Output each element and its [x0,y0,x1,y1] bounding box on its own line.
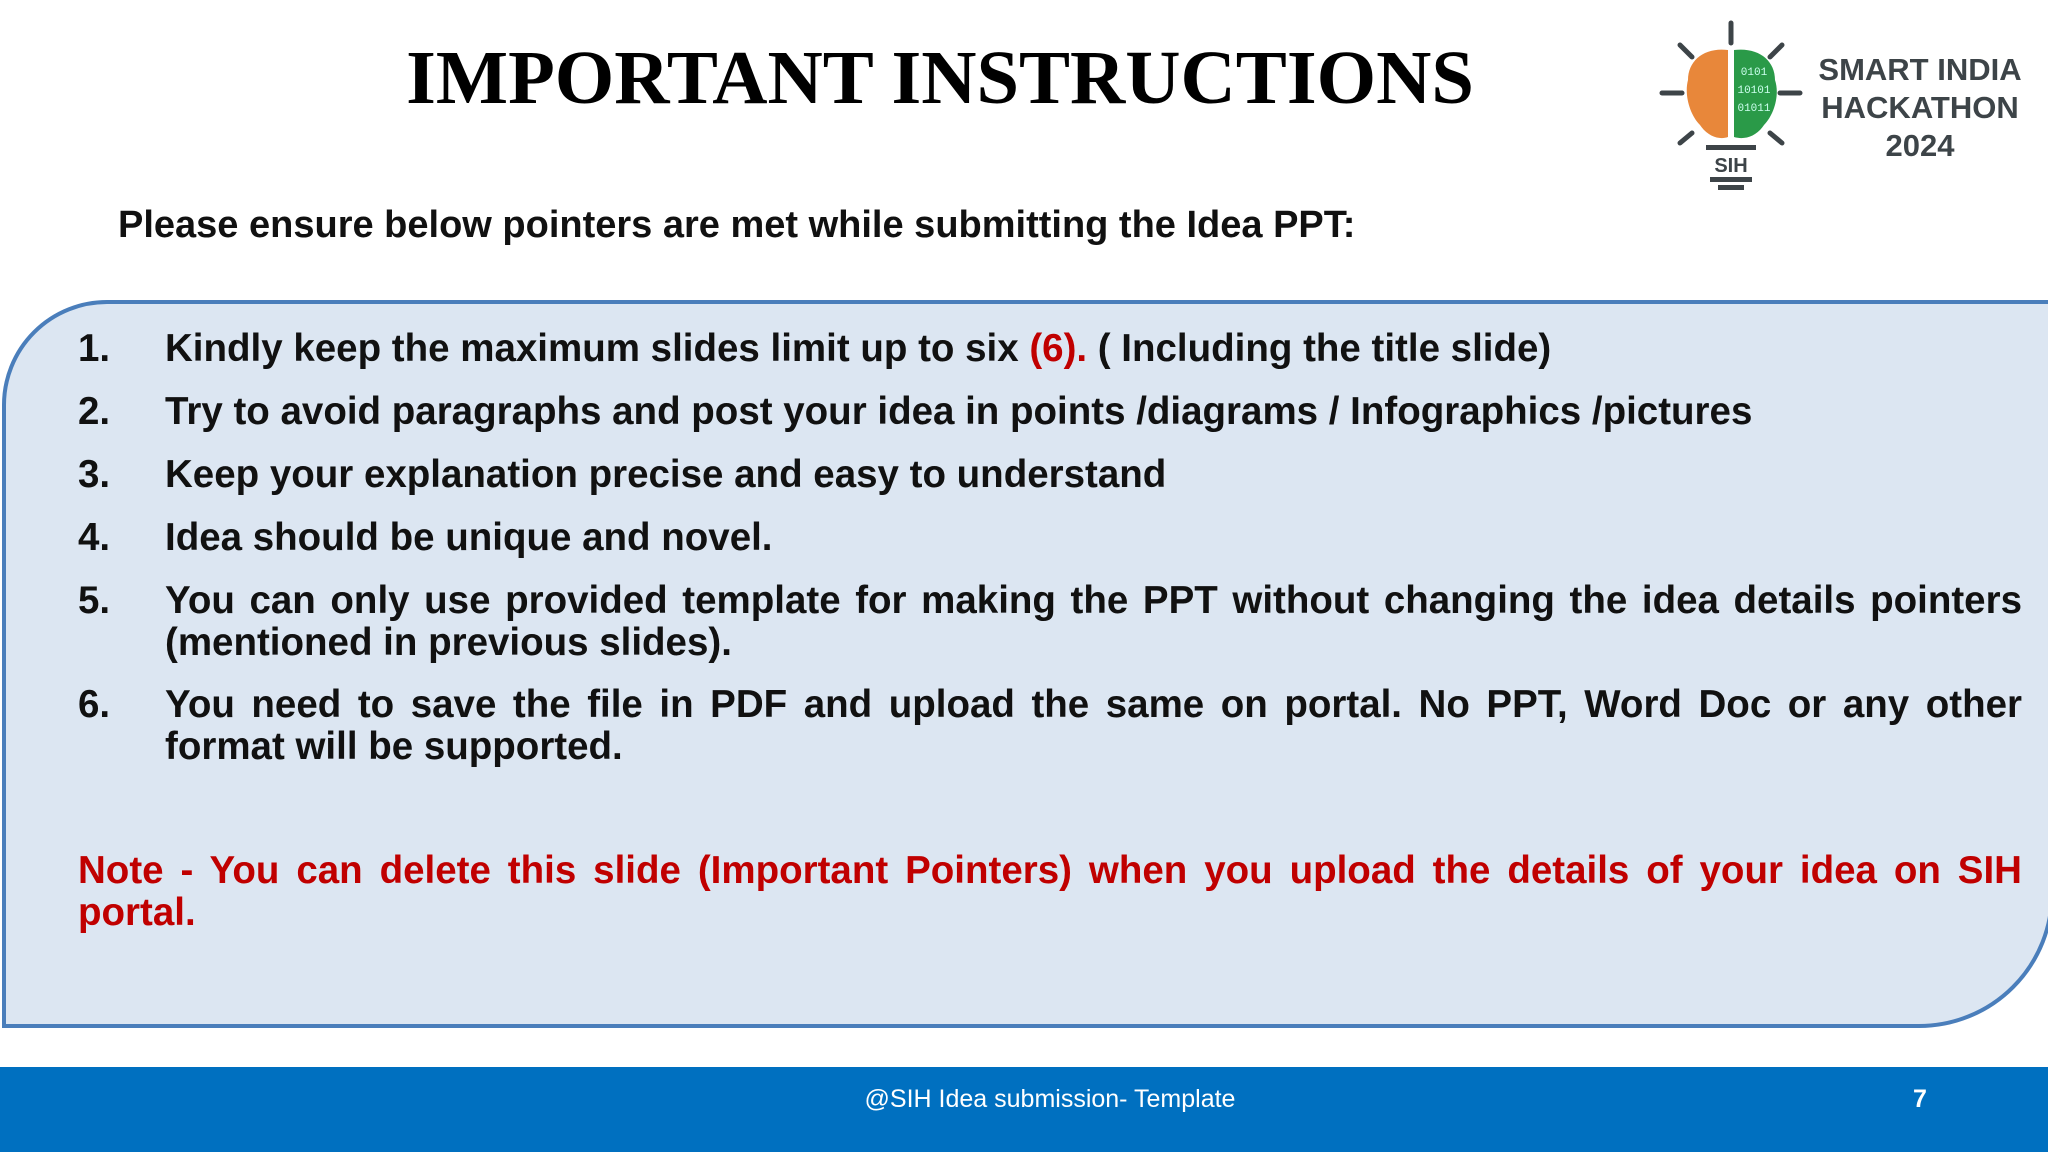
item 1: 1. [78,327,110,370]
item 6: You need to save the file in PDF and upload the same on portal. No PPT, Word Doc or any other format will be supported. [165,683,2022,768]
item 4: Idea should be unique and novel. [165,516,773,559]
title: IMPORTANT INSTRUCTIONS [406,35,1474,120]
logo text: SMART INDIA [1818,52,2022,87]
panel background [2,300,2048,1028]
item 3: 3. [78,453,110,496]
icon: brain bulb: 0101 [1741,67,1768,79]
logo text: HACKATHON [1821,90,2019,125]
page number: 7 [1913,1085,1927,1113]
note: Note - You can delete this slide (Important Pointers) when you upload the details of your idea on SIH portal. [78,849,2022,934]
icon: brain bulb: 10101 [1737,85,1771,97]
item 5: You can only use provided template for making the PPT without changing the idea details pointers (mentioned in previous slides). [165,579,2022,664]
item 3: Keep your explanation precise and easy to understand [165,453,1166,496]
icon: brain bulb: SIH [1714,155,1748,177]
item 4: 4. [78,516,110,559]
item 6: 6. [78,683,110,726]
footer [0,1067,2048,1152]
panel: instructions [2,300,2048,1028]
logo text [1818,52,2022,163]
subtitle: Please ensure below pointers are met while submitting the Idea PPT: [118,204,1355,246]
item 2: Try to avoid paragraphs and post your idea in points /diagrams / Infographics /pictures [165,390,1752,433]
icon: brain bulb [1660,20,1802,190]
item 1: Kindly keep the maximum slides limit up to six (6). ( Including the title slide) [165,327,1551,370]
item 2: 2. [78,390,110,433]
icon: brain bulb: 01011 [1737,103,1771,115]
item 5: 5. [78,579,110,622]
logo text: 2024 [1886,128,1954,163]
logo [1660,20,2022,190]
footer text: @SIH Idea submission- Template [865,1085,1235,1113]
